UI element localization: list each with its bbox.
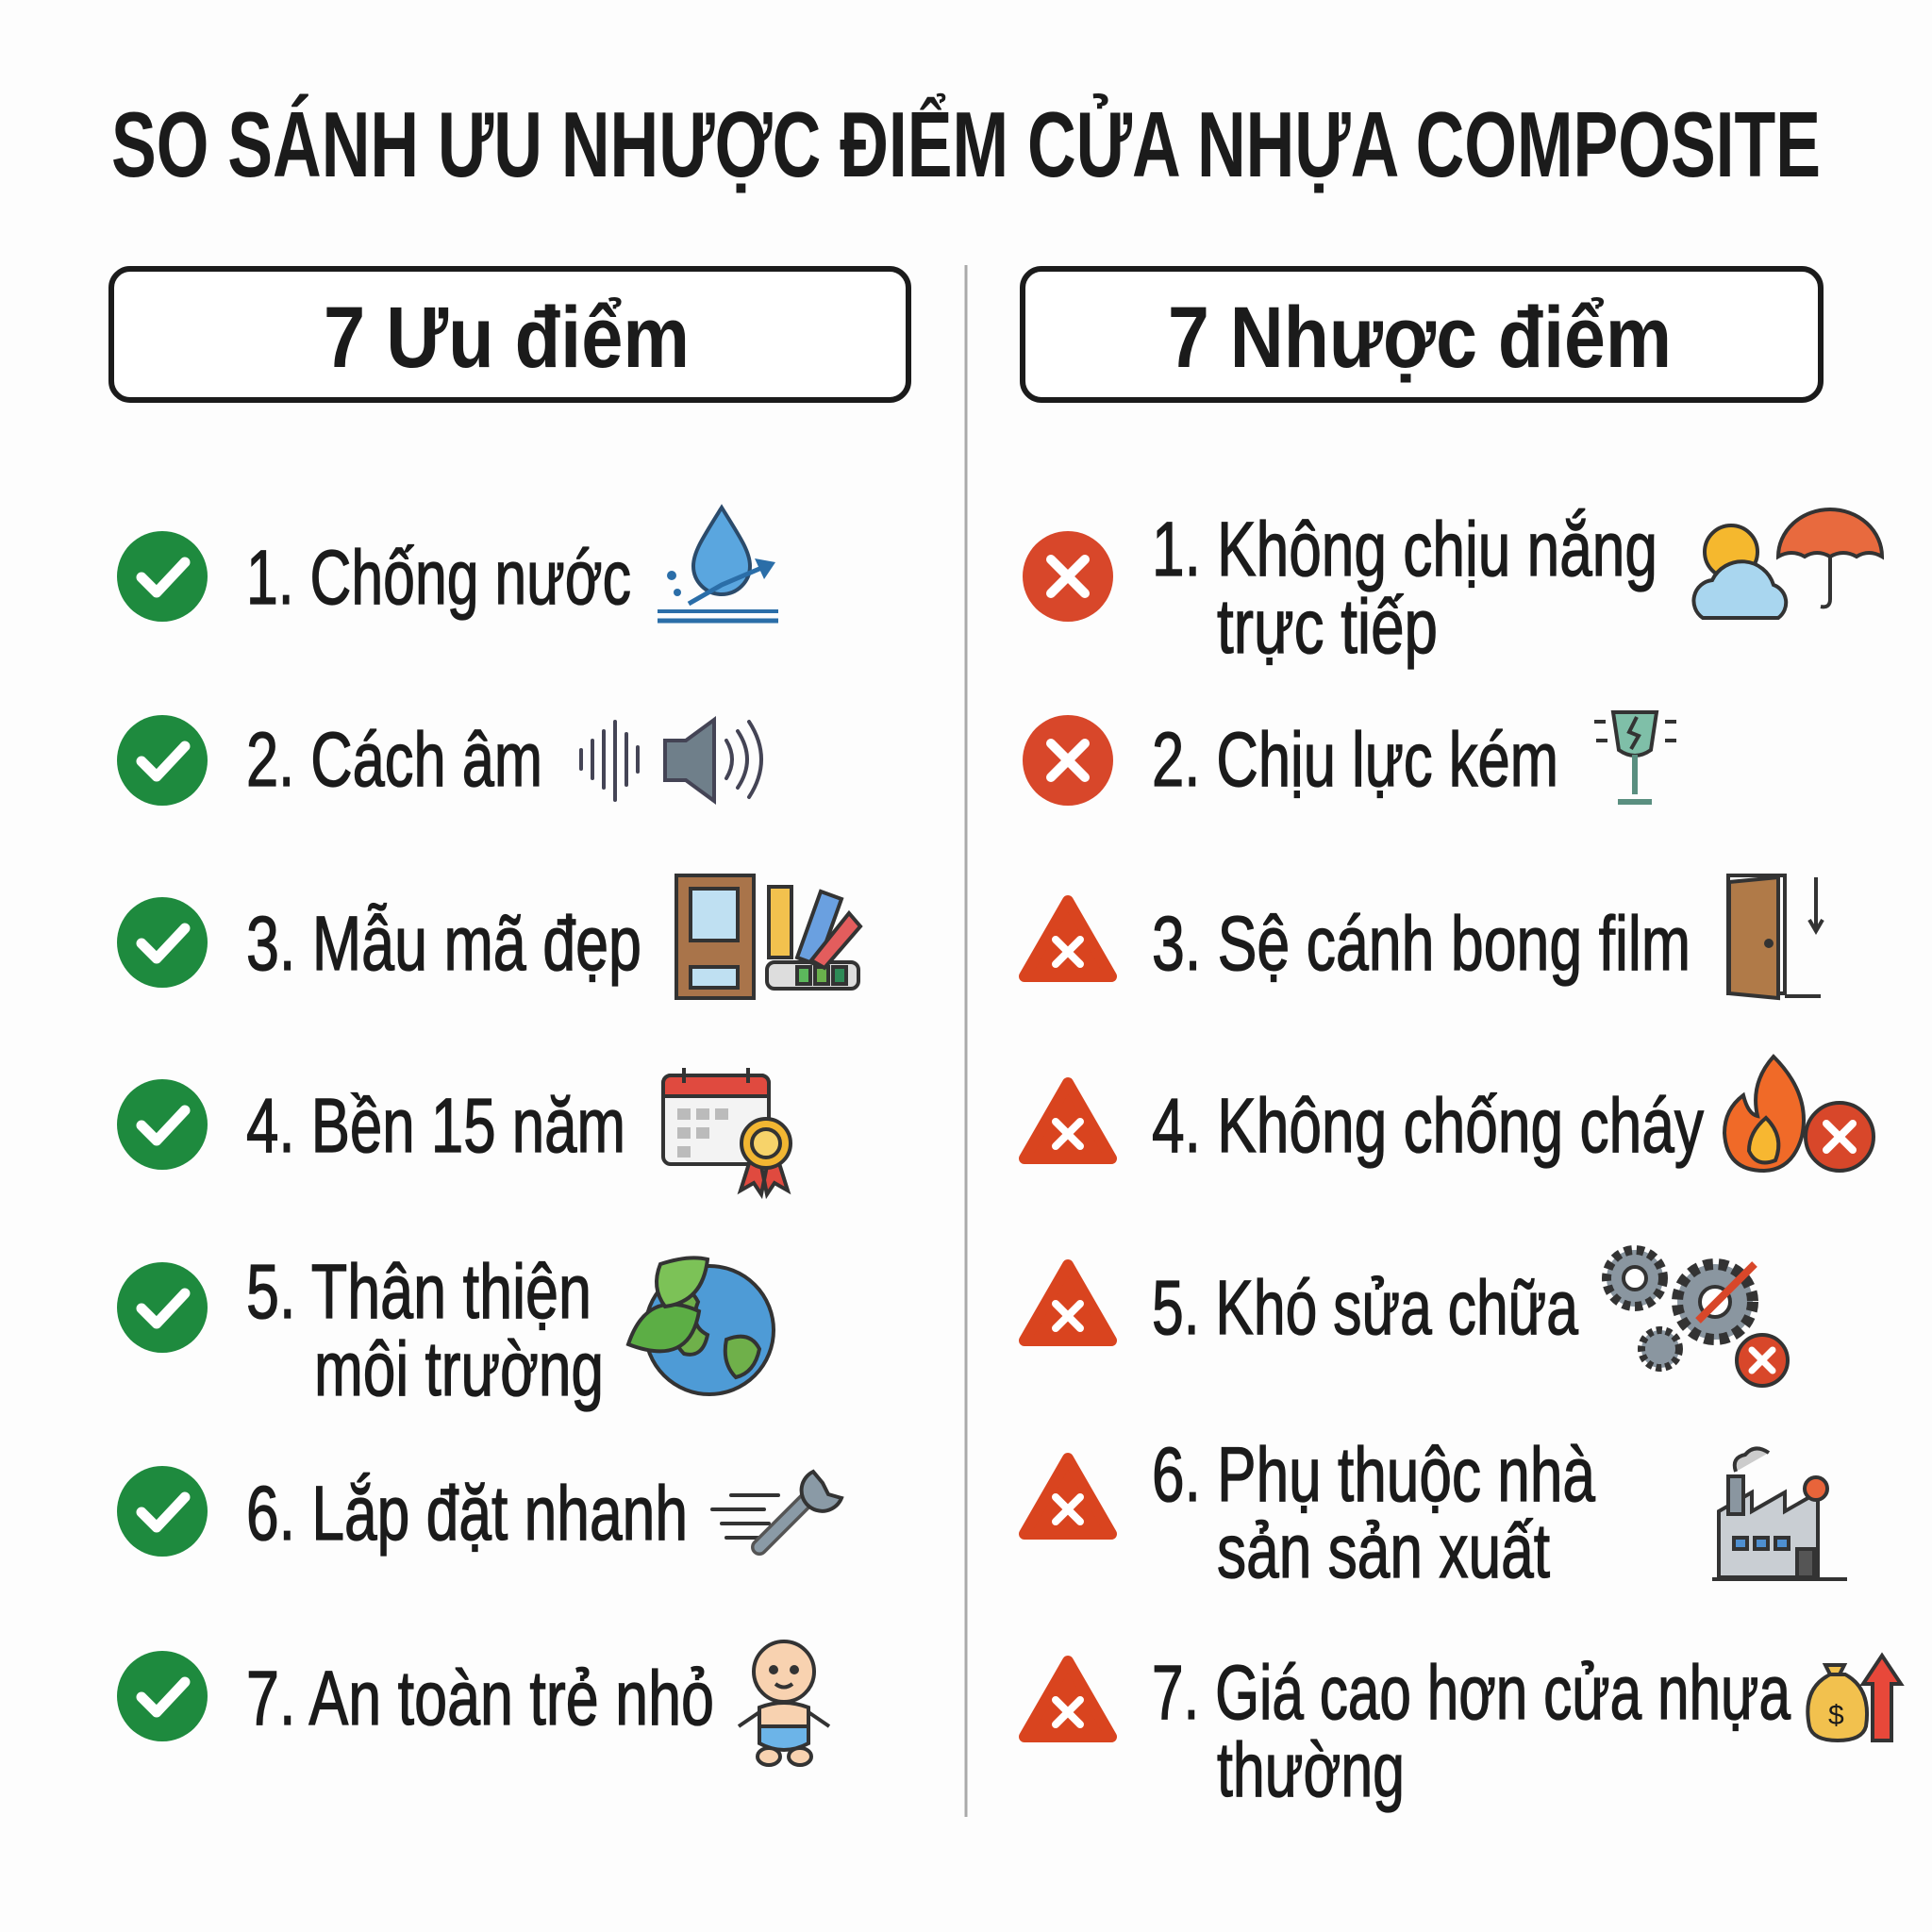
item 3: 3. Sệ cánh bong film: [1152, 901, 1690, 987]
item 7: [117, 1641, 829, 1765]
item 5: 5. Khó sửa chữa: [1152, 1265, 1578, 1351]
item 4: [1024, 1057, 1874, 1171]
header: 7 ưu điểm: 7 Ưu điểm: [324, 290, 690, 386]
item 7: $: [1828, 1700, 1844, 1731]
header: 7 nhược điểm: 7 Nhược điểm: [1168, 290, 1672, 386]
item 5: [117, 1249, 774, 1412]
item 1: [117, 508, 778, 622]
header: 7 nhược điểm: [1023, 269, 1821, 400]
item 1: 1. Không chịu nắng: [1152, 507, 1657, 592]
item 3: 3. Mẫu mã đẹp: [246, 901, 641, 987]
item 3: [1024, 875, 1823, 998]
item 5: [1024, 1250, 1788, 1386]
item 7: thường: [1217, 1727, 1405, 1813]
item 6: sản sản xuất: [1217, 1508, 1550, 1594]
panel: disadvantages: [1023, 507, 1901, 1813]
item 6: 6. Lắp đặt nhanh: [246, 1471, 688, 1557]
item 6: [1024, 1432, 1847, 1594]
item 1: 1. Chống nước: [246, 535, 631, 621]
item 2: 2. Chịu lực kém: [1152, 717, 1558, 803]
item 4: [117, 1068, 791, 1194]
item 2: [117, 715, 761, 806]
header: 7 ưu điểm: [111, 269, 908, 400]
item 7: 7. An toàn trẻ nhỏ: [246, 1656, 714, 1741]
item 3: [117, 875, 860, 998]
item 6: 6. Phụ thuộc nhà: [1152, 1432, 1595, 1518]
item 1: [1023, 507, 1882, 670]
item 4: 4. Bền 15 năm: [246, 1083, 625, 1169]
item 7: [1024, 1650, 1901, 1813]
item 5: môi trường: [314, 1326, 604, 1412]
panel: advantages: [117, 508, 860, 1765]
item 4: 4. Không chống cháy: [1152, 1083, 1704, 1169]
item 5: 5. Thân thiện: [246, 1249, 591, 1335]
item 1: trực tiếp: [1217, 584, 1438, 670]
item 2: 2. Cách âm: [246, 717, 542, 803]
